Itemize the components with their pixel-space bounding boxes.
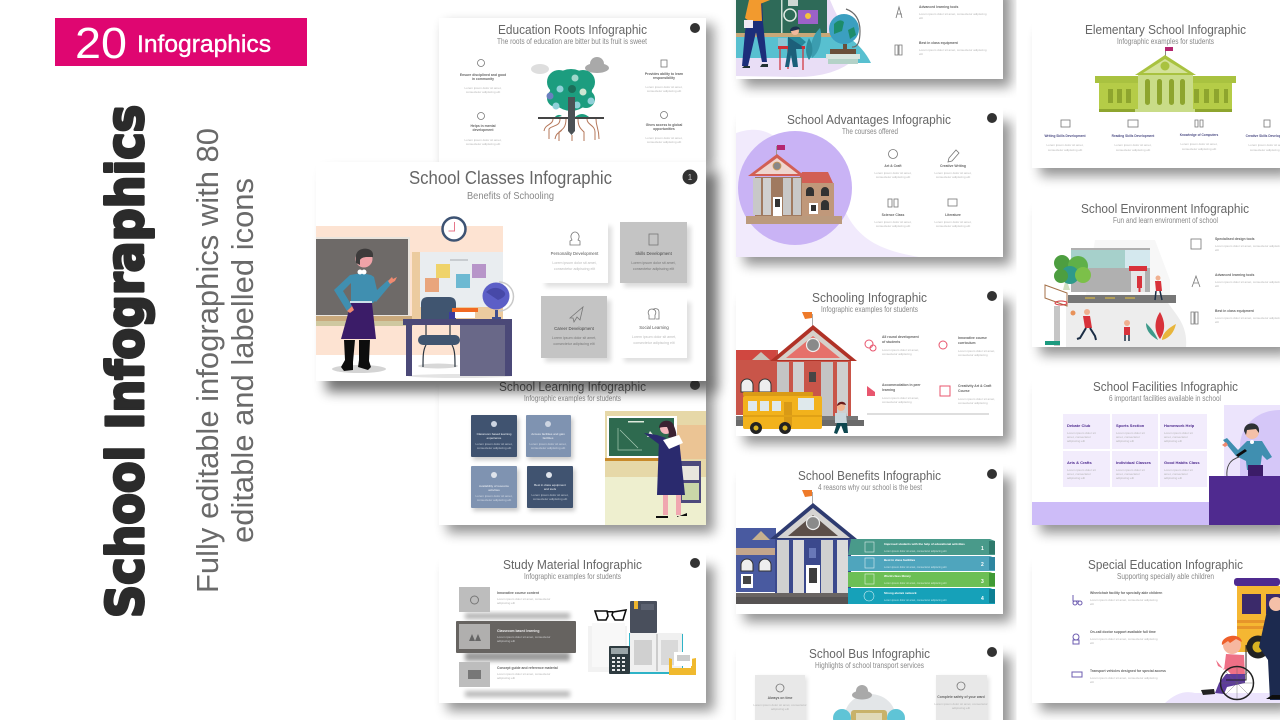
illustration: teacher in classroom bbox=[316, 218, 514, 381]
grid: six facilities: Lorem ipsum dolor sit bbox=[1164, 468, 1193, 472]
panel: School Learning Infographic bbox=[439, 375, 714, 533]
panel: School Benefits Infographic bbox=[736, 464, 1011, 622]
cards: four blue learning cards: Lorem ipsum dolor sit amet, bbox=[531, 493, 569, 497]
cards: bus feature cards bbox=[753, 675, 989, 720]
panel: top cropped slide with teacher and globe bbox=[736, 0, 1011, 87]
subtitle: fully editable text: editable and labelled icons bbox=[225, 178, 260, 543]
row: four skills: Lorem ipsum dolor sit amet, bbox=[1046, 143, 1084, 147]
grid: four pink features: All round development bbox=[882, 335, 920, 339]
panel: School Benefits Infographic: School Benefits Infographic bbox=[798, 469, 941, 483]
panel: Study Material Infographic: Study Material Infographic bbox=[503, 558, 642, 572]
cards: four blue learning cards: consectetur adipiscing elit bbox=[477, 446, 511, 450]
cards: four blue learning cards: Lorem ipsum dolor sit amet, bbox=[475, 494, 513, 498]
cards: four blue learning cards bbox=[471, 415, 575, 511]
bars: four reasons: 4 bbox=[981, 596, 984, 602]
grid: six facilities bbox=[1063, 414, 1207, 487]
grid: six facilities: Debate Club bbox=[1067, 423, 1091, 428]
cards: four benefits cards: Personality Development bbox=[551, 251, 599, 256]
cards: four blue learning cards: facilities bbox=[543, 436, 554, 440]
panel: Study Material Infographic: Infographic examples for students bbox=[524, 572, 621, 581]
panel: Special Education Infographic: Supporting specially able children bbox=[1117, 572, 1214, 581]
list: three environment features bbox=[1191, 237, 1280, 324]
bars: four reasons: Lorem ipsum dolor sit amet, consectetur adipiscing elit bbox=[884, 565, 947, 569]
list: three environment features: Specialised design tools bbox=[1215, 237, 1255, 241]
cards: four benefits cards: Social Learning bbox=[639, 325, 669, 330]
grid: six facilities: Lorem ipsum dolor sit bbox=[1164, 431, 1193, 435]
panel: Special Education Infographic bbox=[1032, 553, 1280, 711]
panel: School Benefits Infographic: 4 reasons why our school is the best bbox=[818, 483, 923, 492]
icon: person bbox=[570, 232, 580, 245]
grid: four pink features: Lorem ipsum dolor sit amet, bbox=[958, 349, 995, 353]
grid: four course features: Lorem ipsum dolor sit amet, bbox=[934, 220, 972, 224]
bars: four reasons bbox=[848, 539, 995, 604]
cards: bus feature cards: Always on time bbox=[768, 696, 792, 700]
row: four skills bbox=[1044, 120, 1280, 152]
grid: four pink features: consectetur adipiscing bbox=[882, 400, 912, 404]
cards: four blue learning cards: Lorem ipsum dolor sit amet, bbox=[475, 442, 513, 446]
banner: 20 Infographics bbox=[55, 18, 307, 68]
panel: School Advantages Infographic: School Advantages Infographic bbox=[787, 113, 951, 127]
grid: six facilities: amet, consectetur bbox=[1164, 435, 1188, 439]
panel: Education Roots Infographic: Education Roots Infographic bbox=[498, 23, 647, 37]
icon: group bbox=[648, 309, 659, 319]
text: two feature rows: Lorem ipsum dolor sit amet, consectetur adipiscing bbox=[919, 12, 987, 16]
text: left and right feature blocks: Gives access to global bbox=[646, 123, 682, 127]
illustration: teacher at green board bbox=[605, 411, 706, 525]
text: left and right feature blocks: Lorem ipsum dolor sit amet, bbox=[645, 136, 683, 140]
subtitle: fully editable text: Fully editable infographics with 80 bbox=[190, 128, 225, 593]
list: three study rows: adipiscing elit bbox=[497, 676, 515, 680]
cards: four blue learning cards: Lorem ipsum dolor sit amet, bbox=[529, 442, 567, 446]
grid: six facilities: adipiscing elit bbox=[1116, 439, 1134, 443]
cards: four benefits cards bbox=[541, 222, 691, 362]
panel: School Bus Infographic: School Bus Infographic bbox=[809, 647, 930, 661]
list: three environment features: Best in class equipment bbox=[1215, 309, 1255, 313]
text: left and right feature blocks: opportunities bbox=[653, 127, 675, 131]
panel: Elementary School Infographic bbox=[1032, 18, 1280, 176]
illustration: bus with cloud bbox=[833, 685, 905, 720]
list: three support features: Transport vehicles designed for special access bbox=[1090, 669, 1166, 673]
grid: six facilities: Individual Classes bbox=[1116, 460, 1152, 465]
cards: four blue learning cards: experience bbox=[487, 436, 502, 440]
bars: four reasons: Improved students with the help of educational activities bbox=[884, 542, 965, 546]
row: four skills: Lorem ipsum dolor sit amet, bbox=[1180, 142, 1218, 146]
list: three environment features: elit bbox=[1215, 248, 1219, 252]
list: three study rows: Lorem ipsum dolor sit amet, consectetur bbox=[497, 597, 550, 601]
grid: four course features bbox=[874, 150, 972, 228]
list: three support features: elit bbox=[1090, 602, 1094, 606]
grid: six facilities: adipiscing elit bbox=[1067, 476, 1085, 480]
text: left and right feature blocks: consectetur adipiscing elit bbox=[647, 89, 681, 93]
panel: School Advantages Infographic bbox=[736, 108, 1011, 265]
cards: bus feature cards: Lorem ipsum dolor sit amet, consectetur bbox=[934, 702, 988, 706]
text: left and right feature blocks: Ensure disciplined and good bbox=[460, 73, 506, 77]
row: four skills: Lorem ipsum dolor sit amet, bbox=[1114, 143, 1152, 147]
text: two feature rows: elit bbox=[919, 16, 923, 20]
panel: Elementary School Infographic: Infographic examples for students bbox=[1117, 37, 1214, 46]
list: three support features bbox=[1072, 591, 1166, 684]
list: three study rows: adipiscing elit bbox=[497, 601, 515, 605]
grid: four course features: consectetur adipiscing elit bbox=[936, 175, 970, 179]
cards: four benefits cards: consectetur adipiscing elit bbox=[633, 267, 674, 271]
grid: four course features: Lorem ipsum dolor sit amet, bbox=[874, 171, 912, 175]
list: three study rows: Lorem ipsum dolor sit amet, consectetur bbox=[497, 672, 550, 676]
panel: Education Roots Infographic: The roots of education are bitter but its fruit is sweet bbox=[497, 37, 648, 46]
list: three support features: elit bbox=[1090, 680, 1094, 684]
panel: School Learning Infographic: School Learning Infographic bbox=[499, 380, 646, 394]
grid: four course features: consectetur adipiscing elit bbox=[876, 175, 910, 179]
list: three support features: elit bbox=[1090, 641, 1094, 645]
text: two feature rows: Lorem ipsum dolor sit amet, consectetur adipiscing bbox=[919, 48, 987, 52]
grid: four pink features: Accommodation in peer bbox=[882, 383, 921, 387]
cards: four benefits cards: consectetur adipiscing elit bbox=[553, 342, 595, 346]
cards: bus feature cards: adipiscing elit bbox=[771, 707, 789, 711]
list: three support features: Wheelchair facility for specially able children bbox=[1090, 591, 1162, 595]
grid: four course features: Creative Writing bbox=[940, 164, 966, 168]
cards: four benefits cards: consectetur adipiscing elit bbox=[554, 267, 595, 271]
grid: four pink features: learning bbox=[882, 388, 895, 392]
panel: School Classes Infographic (featured) bbox=[316, 162, 718, 392]
bars: four reasons: Lorem ipsum dolor sit amet, consectetur adipiscing elit bbox=[884, 598, 947, 602]
grid: six facilities: adipiscing elit bbox=[1164, 439, 1182, 443]
panel: Schooling Infographic: Infographic examples for students bbox=[821, 305, 918, 314]
panel: School Classes Infographic (featured): School Classes Infographic bbox=[409, 168, 612, 188]
text: left and right feature blocks: Helps in mental bbox=[470, 124, 496, 128]
bars: four reasons: Best in class facilities bbox=[884, 558, 916, 562]
grid: six facilities: Lorem ipsum dolor sit bbox=[1116, 431, 1145, 435]
bars: four reasons: World class library bbox=[884, 574, 911, 578]
list: three support features: Lorem ipsum dolor sit amet, consectetur adipiscing bbox=[1090, 676, 1158, 680]
bars: four reasons: 1 bbox=[981, 546, 984, 552]
grid: four pink features: consectetur adipiscing bbox=[882, 352, 912, 356]
grid: six facilities: Lorem ipsum dolor sit bbox=[1067, 431, 1096, 435]
row: four skills: Writing Skills Development bbox=[1044, 134, 1086, 138]
text: left and right feature blocks: Lorem ipsum dolor sit amet, bbox=[464, 138, 502, 142]
grid: six facilities: amet, consectetur bbox=[1164, 472, 1188, 476]
grid: four course features: consectetur adipiscing elit bbox=[936, 224, 970, 228]
panel: School Classes Infographic (featured): 1 bbox=[688, 173, 693, 182]
grid: six facilities: Lorem ipsum dolor sit bbox=[1067, 468, 1096, 472]
cards: four benefits cards: Lorem ipsum dolor sit amet, bbox=[552, 261, 597, 265]
bars: four reasons: Lorem ipsum dolor sit amet, consectetur adipiscing elit bbox=[884, 549, 947, 553]
grid: four pink features: Lorem ipsum dolor sit amet, bbox=[958, 397, 995, 401]
cards: four benefits cards: consectetur adipiscing elit bbox=[633, 341, 675, 345]
main title: School Infographics: School Infographics bbox=[97, 105, 156, 618]
grid: four pink features: curriculum bbox=[958, 341, 976, 345]
grid: four pink features: consectetur adipiscing bbox=[958, 401, 988, 405]
grid: four course features: Science Class bbox=[882, 213, 905, 217]
icon: paper plane bbox=[570, 307, 583, 322]
grid: four pink features: Innovative course bbox=[958, 336, 987, 340]
list: three study rows: Innovative course content bbox=[497, 591, 540, 595]
banner: 20 Infographics: 20 bbox=[75, 19, 127, 68]
bars: four reasons: 2 bbox=[981, 562, 984, 568]
panel: Study Material Infographic bbox=[439, 553, 714, 711]
grid: four pink features: Course bbox=[958, 389, 970, 393]
grid: four course features: consectetur adipiscing elit bbox=[876, 224, 910, 228]
cards: four blue learning cards: consectetur adipiscing elit bbox=[533, 497, 567, 501]
grid: six facilities: adipiscing elit bbox=[1116, 476, 1134, 480]
row: four skills: Reading Skills Development bbox=[1112, 134, 1155, 138]
panel: School Environment Infographic: Fun and learn environment of school bbox=[1113, 216, 1218, 225]
grid: four pink features: Lorem ipsum dolor sit amet, bbox=[882, 396, 919, 400]
illustration: school building on purple circle bbox=[738, 131, 852, 245]
text: left and right feature blocks: Provides ability to learn bbox=[645, 72, 683, 76]
row: four skills: consectetur adipiscing elit bbox=[1048, 148, 1082, 152]
list: three support features: On-call doctor support available full time bbox=[1090, 630, 1156, 634]
grid: four pink features: Creativity Art & Craft bbox=[958, 384, 992, 388]
panel: School Facilities Infographic: School Facilities Infographic bbox=[1093, 380, 1238, 394]
list: three study rows: Concept guide and reference material bbox=[497, 666, 558, 670]
illustration: books, glasses, calculator bbox=[588, 601, 696, 675]
grid: four pink features: consectetur adipiscing bbox=[958, 353, 988, 357]
list: three environment features: Advanced learning tools bbox=[1215, 273, 1254, 277]
list: three support features: Lorem ipsum dolor sit amet, consectetur adipiscing bbox=[1090, 637, 1158, 641]
panel: Elementary School Infographic: Elementary School Infographic bbox=[1085, 23, 1246, 37]
list: three support features: Lorem ipsum dolor sit amet, consectetur adipiscing bbox=[1090, 598, 1158, 602]
illustration: green school building bbox=[1095, 47, 1236, 112]
panel: School Advantages Infographic: The courses offered bbox=[842, 127, 898, 136]
cards: four blue learning cards: Classroom based learning bbox=[477, 432, 512, 436]
cards: four blue learning cards: and tools bbox=[544, 487, 557, 491]
text: left and right feature blocks: consectetur adipiscing elit bbox=[647, 140, 681, 144]
cards: four benefits cards: Career Development bbox=[554, 326, 595, 331]
illustration: child in wheelchair with bus bbox=[1165, 578, 1280, 703]
cards: four benefits cards: Lorem ipsum dolor sit amet, bbox=[632, 335, 676, 339]
cards: four blue learning cards: consectetur adipiscing elit bbox=[477, 498, 511, 502]
panel: School Environment Infographic: School Environment Infographic bbox=[1081, 202, 1249, 216]
grid: four course features: Art & Craft bbox=[884, 164, 902, 168]
text: two feature rows: Best in class equipment bbox=[919, 41, 959, 45]
panel: School Environment Infographic bbox=[1032, 197, 1280, 355]
cards: four benefits cards: Lorem ipsum dolor sit amet, bbox=[552, 336, 596, 340]
illustration: tree with roots bbox=[531, 57, 609, 141]
panel: School Facilities Infographic: 6 important facilities available in school bbox=[1109, 394, 1221, 403]
text: two feature rows bbox=[895, 5, 987, 56]
grid: four course features: Lorem ipsum dolor sit amet, bbox=[934, 171, 972, 175]
text: left and right feature blocks: development bbox=[473, 128, 494, 132]
panel: Schooling Infographic bbox=[736, 287, 1011, 444]
illustration: classroom with globe bbox=[736, 0, 871, 77]
panel: Schooling Infographic: Schooling Infographic bbox=[812, 291, 927, 305]
text: left and right feature blocks: consectetur adipiscing elit bbox=[466, 142, 500, 146]
grid: six facilities: amet, consectetur bbox=[1067, 472, 1091, 476]
illustration: speaker at podium bbox=[1209, 405, 1280, 525]
panel: School Bus Infographic: Highlights of school transport services bbox=[815, 661, 924, 670]
bars: four reasons: Strong alumni network bbox=[884, 591, 917, 595]
list: three study rows: Lorem ipsum dolor sit amet, consectetur bbox=[497, 635, 550, 639]
cards: four benefits cards: Lorem ipsum dolor sit amet, bbox=[631, 261, 676, 265]
list: three environment features: elit bbox=[1215, 320, 1219, 324]
grid: six facilities: Homework Help bbox=[1164, 423, 1195, 428]
banner: 20 Infographics: Infographics bbox=[137, 31, 271, 58]
row: four skills: consectetur adipiscing elit bbox=[1182, 147, 1216, 151]
grid: four pink features: Lorem ipsum dolor sit amet, bbox=[882, 348, 919, 352]
cards: bus feature cards: adipiscing elit bbox=[952, 706, 970, 710]
icon: clipboard bbox=[649, 234, 658, 245]
list: three study rows: adipiscing elit bbox=[497, 639, 515, 643]
panel: Special Education Infographic: Special Education Infographic bbox=[1088, 558, 1243, 572]
band: lilac floor bbox=[1032, 502, 1209, 525]
grid: four course features: Literature bbox=[945, 213, 961, 217]
grid: six facilities: Lorem ipsum dolor sit bbox=[1116, 468, 1145, 472]
illustration: school yard scene bbox=[1045, 240, 1186, 347]
list: three study rows bbox=[456, 587, 576, 697]
grid: four pink features: of students bbox=[882, 340, 900, 344]
cards: four blue learning cards: Availability of resource bbox=[479, 484, 509, 488]
text: left and right feature blocks: Lorem ipsum dolor sit amet, bbox=[645, 85, 683, 89]
grid: six facilities: Good Habits Class bbox=[1164, 460, 1200, 465]
grid: six facilities: amet, consectetur bbox=[1116, 435, 1140, 439]
cards: four benefits cards: Skills Development bbox=[635, 251, 673, 256]
text: two feature rows: Advanced learning tools bbox=[919, 5, 958, 9]
cards: bus feature cards: Lorem ipsum dolor sit amet, consectetur bbox=[753, 703, 807, 707]
row: four skills: Knowledge of Computers bbox=[1180, 133, 1219, 137]
panel: School Bus Infographic bbox=[736, 643, 1011, 720]
grid: six facilities: Sports Section bbox=[1116, 423, 1145, 428]
text: left and right feature blocks: consectetur adipiscing elit bbox=[466, 90, 500, 94]
grid: four pink features bbox=[865, 335, 995, 415]
grid: six facilities: amet, consectetur bbox=[1116, 472, 1140, 476]
cards: four blue learning cards: consectetur adipiscing elit bbox=[531, 446, 565, 450]
list: three study rows: Classroom based learning bbox=[497, 629, 539, 633]
bars: four reasons: Lorem ipsum dolor sit amet, consectetur adipiscing elit bbox=[884, 581, 947, 585]
text: left and right feature blocks: Lorem ipsum dolor sit amet, bbox=[464, 86, 502, 90]
panel: School Learning Infographic: Infographic examples for students bbox=[524, 394, 621, 403]
text: left and right feature blocks: responsibility bbox=[653, 76, 675, 80]
panel: School Facilities Infographic bbox=[1032, 375, 1280, 533]
subtitle: fully editable text bbox=[190, 128, 260, 593]
cards: four blue learning cards: Access facilities and gain bbox=[531, 432, 565, 436]
text: left and right feature blocks bbox=[460, 60, 683, 146]
panel: Education Roots Infographic bbox=[439, 18, 714, 170]
grid: six facilities: Arts & Crafts bbox=[1067, 460, 1092, 465]
grid: six facilities: adipiscing elit bbox=[1164, 476, 1182, 480]
grid: six facilities: adipiscing elit bbox=[1067, 439, 1085, 443]
illustration: red school, yellow bus, boy bbox=[736, 312, 864, 434]
text: left and right feature blocks: in community bbox=[472, 77, 494, 81]
row: four skills: consectetur adipiscing elit bbox=[1116, 148, 1150, 152]
text: two feature rows: elit bbox=[919, 52, 923, 56]
illustration: blue school building bbox=[736, 490, 860, 604]
grid: six facilities: amet, consectetur bbox=[1067, 435, 1091, 439]
list: three environment features: elit bbox=[1215, 284, 1219, 288]
cards: bus feature cards: Complete safety of your ward bbox=[937, 695, 985, 699]
bars: four reasons: 3 bbox=[981, 579, 984, 585]
cards: four blue learning cards: Best in class equipment bbox=[534, 483, 566, 487]
cards: four blue learning cards: activities bbox=[488, 488, 500, 492]
panel: School Classes Infographic (featured): Benefits of Schooling bbox=[467, 191, 554, 202]
grid: four course features: Lorem ipsum dolor sit amet, bbox=[874, 220, 912, 224]
